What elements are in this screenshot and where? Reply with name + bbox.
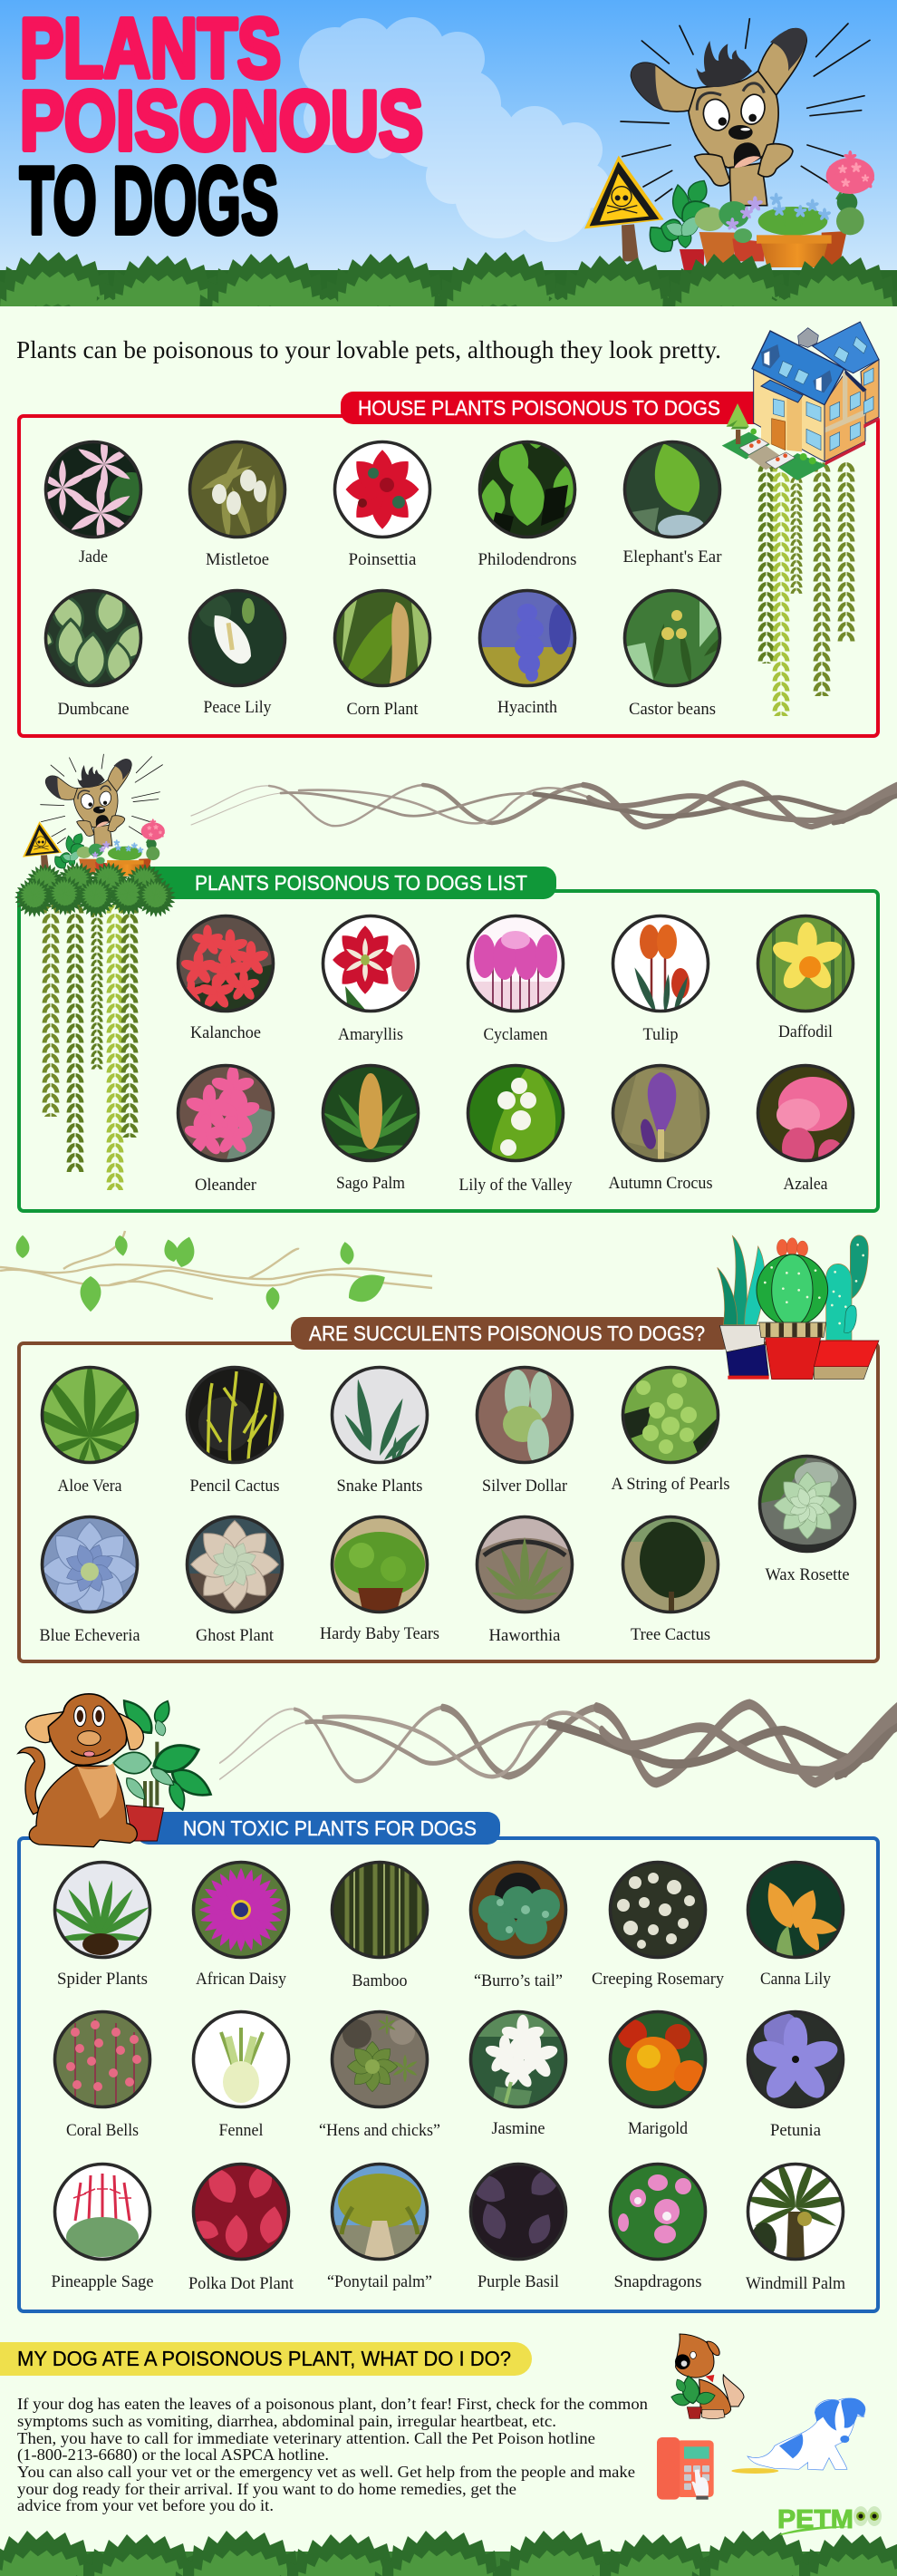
heading: plants list [136,867,556,899]
plant: Hardy Baby Tears: Hardy Baby Tears [320,1624,439,1643]
plant: Coral Bells [53,2009,152,2140]
plant: Spider Plants: Spider Plants [57,1970,148,1989]
plant: Mistletoe [188,440,287,569]
plant: Bamboo: Bamboo [352,1971,408,1990]
plant: Ghost Plant: Ghost Plant [196,1626,275,1645]
plant: Purple Basil: Purple Basil [477,2272,559,2291]
clouds [299,17,610,242]
plant: Petunia: Petunia [770,2121,822,2140]
illustration: dog eating plant [670,2334,744,2419]
plant: Tulip [611,914,710,1044]
illustration: happy dog with plant [18,1694,216,1847]
plant: Pineapple Sage: Pineapple Sage [51,2272,154,2291]
plant: Sago Palm: Sago Palm [336,1174,405,1193]
plant: Philodendrons [478,441,576,565]
plant: Snake Plants: Snake Plants [337,1477,422,1496]
plant: Autumn Crocus: Autumn Crocus [609,1174,712,1193]
intro text: Plants can be poisonous to your lovable pets, although they look pretty. [16,336,721,363]
plant: Windmill Palm: Windmill Palm [746,2274,845,2293]
plant: Aloe Vera [40,1365,140,1492]
plant: Hens and chicks [319,2009,440,2140]
plant: Daffodil: Daffodil [778,1022,833,1041]
plant: Jasmine [468,2009,568,2138]
plant: Poinsettia: Poinsettia [348,550,417,569]
plant: Hens and chicks: “Hens and chicks” [319,2121,440,2140]
plant: Azalea [756,1063,855,1194]
text block: advice: If your dog has eaten the leaves of a poisonous plant, don’t fear! First, check for the common [17,2395,648,2413]
plant: Snapdragons [608,2162,708,2291]
plant: Pencil Cactus [185,1365,285,1496]
plant: A String of Pearls: A String of Pearls [611,1475,730,1494]
plant: Mistletoe: Mistletoe [206,550,269,569]
panel: non toxic [18,1694,878,2311]
plant: Autumn Crocus [609,1063,712,1193]
plant: A String of Pearls [611,1365,730,1494]
heading: succulents [291,1317,735,1350]
plant: Corn Plant: Corn Plant [346,700,419,719]
plant: African Daisy [192,1860,290,1988]
plant: Silver Dollar [475,1365,574,1496]
panel: plants list [7,754,878,1211]
plant: Marigold [608,2009,708,2138]
plant: Windmill Palm [739,2153,852,2293]
hanging vines under house [757,462,855,716]
heading: house plants: HOUSE PLANTS POISONOUS TO DOGS [358,396,720,420]
plant: Cyclamen: Cyclamen [484,1025,548,1044]
plant: Creeping Rosemary: Creeping Rosemary [592,1970,724,1989]
plant: Kalanchoe: Kalanchoe [190,1023,261,1042]
logo: PETMOO [777,2505,882,2535]
panel: succulents [16,1235,879,1661]
plant: Polka Dot Plant: Polka Dot Plant [188,2274,294,2293]
decorative brown vine [191,783,897,827]
header bushes [0,252,897,306]
plant: Amaryllis: Amaryllis [338,1025,403,1044]
plant: Bamboo [330,1860,429,1990]
plant: Snapdragons: Snapdragons [614,2272,701,2291]
plant: Haworthia [475,1515,574,1645]
panel: house plants [19,322,879,736]
decorative green vine [0,1231,432,1312]
heading: plants list: PLANTS POISONOUS TO DOGS LIST [195,871,527,895]
header sky [0,0,897,306]
plant: Elephant's Ear [622,436,722,567]
plant: Elephant's Ear: Elephant's Ear [623,547,722,567]
plant: Lily of the Valley: Lily of the Valley [458,1176,573,1195]
plant: Ghost Plant [185,1515,285,1645]
plant: Blue Echeveria [40,1515,140,1645]
plant: Pencil Cactus: Pencil Cactus [190,1477,279,1496]
illustration: telephone [657,2437,714,2500]
plant: Jade: Jade [79,547,108,567]
plant: Corn Plant [333,589,431,714]
heading: non toxic [136,1812,500,1845]
plant: Lily of the Valley [458,1063,573,1195]
plant: Petunia [746,2009,845,2140]
plant: Jade [43,441,143,562]
heading: non toxic: NON TOXIC PLANTS FOR DOGS [183,1816,477,1840]
plant: Pineapple Sage [51,2162,154,2291]
plant: Oleander [176,1063,275,1195]
plant: Amaryllis [321,914,420,1044]
plant: Daffodil [756,914,855,1041]
plant: Poinsettia [333,440,432,569]
plant: Hyacinth: Hyacinth [497,698,557,717]
text block: advice: Then, you have to call for immediate veterinary attention. Call the Pet Poison hotline [17,2429,595,2447]
decorative brown vine 2 [220,1704,897,1783]
heading: house plants [341,392,776,424]
plant: Burro's tail: “Burro’s tail” [474,1971,563,1990]
plant: Blue Echeveria: Blue Echeveria [40,1626,140,1645]
plant: Hyacinth [477,588,577,717]
plant: Burro's tail [468,1860,568,1990]
plant: Castor beans: Castor beans [629,700,716,719]
plant: Haworthia: Haworthia [489,1626,561,1645]
plant: Dumbcane: Dumbcane [58,700,129,719]
title: TO DOGS [20,147,279,254]
plant: Coral Bells: Coral Bells [66,2121,139,2140]
plant: Canna Lily: Canna Lily [760,1970,831,1989]
plant: Philodendrons: Philodendrons [478,550,576,569]
plant: Fennel [191,2009,291,2140]
illustration: potted cactus [718,1235,879,1380]
plant: Tree Cactus: Tree Cactus [631,1625,710,1644]
plant: Creeping Rosemary [592,1860,724,1989]
text block: advice: advice from your vet before you do it. [17,2496,274,2514]
plant: Dumbcane [43,589,143,714]
title: PLANTS [20,1,281,95]
plant: Peace Lily: Peace Lily [203,698,272,717]
plant: Fennel: Fennel [219,2121,263,2140]
text block: advice [17,2395,648,2514]
plant: Purple Basil [462,2161,568,2291]
bottom bushes [0,2531,897,2576]
plant: Jasmine: Jasmine [491,2119,545,2138]
plant: Oleander: Oleander [195,1176,257,1195]
plant: Aloe Vera: Aloe Vera [58,1477,122,1496]
plant: Polka Dot Plant [188,2159,294,2293]
plant: Ponytail palm: “Ponytail palm” [327,2272,432,2291]
plant: Snake Plants [330,1365,429,1496]
plant: Kalanchoe [176,914,275,1042]
plant: African Daisy: African Daisy [196,1970,286,1989]
plant: Castor beans [623,589,721,714]
plant: Hardy Baby Tears [320,1515,439,1643]
plant: Wax Rosette [757,1454,857,1584]
illustration: sick blue dog [731,2398,865,2474]
text block: advice: You can also call your vet or the emergency vet as well. Get help from the people and make [17,2463,635,2481]
plant: Spider Plants [50,1860,152,1989]
title [20,1,423,254]
plant: Wax Rosette: Wax Rosette [765,1565,850,1584]
heading: what do I do [0,2342,532,2376]
bush cluster [7,855,183,925]
heading: what do I do: MY DOG ATE A POISONOUS PLANT, WHAT DO I DO? [17,2347,511,2370]
plant: Cyclamen [466,914,565,1044]
heading: succulents: ARE SUCCULENTS POISONOUS TO DOGS? [309,1322,705,1345]
small dog scene [23,754,165,877]
text block: advice: (1-800-213-6680) or the local ASPCA hotline. [17,2445,329,2465]
plant: Tulip: Tulip [643,1025,678,1044]
plant: Azalea: Azalea [783,1175,828,1194]
plant: Ponytail palm [327,2162,432,2291]
illustration: scared dog with poison sign and potted plants [584,19,875,270]
plant: Peace Lily [188,588,287,717]
text block: advice: your dog ready for their arrival. If you want to do home remedies, get the [17,2480,516,2498]
plant: Marigold: Marigold [628,2119,688,2138]
text block: advice: symptoms such as vomiting, diarrhea, abdominal pain, irregular heartbeat, etc. [17,2412,556,2430]
logo: PETMOO: PETM [777,2505,854,2534]
illustration: house [722,322,879,480]
plant: Tree Cactus [621,1515,720,1644]
hanging vines [42,904,139,1190]
plant: Sago Palm [321,1064,420,1192]
plant: Silver Dollar: Silver Dollar [482,1477,568,1496]
title: POISONOUS [20,73,423,168]
plant: Canna Lily [746,1860,845,1989]
